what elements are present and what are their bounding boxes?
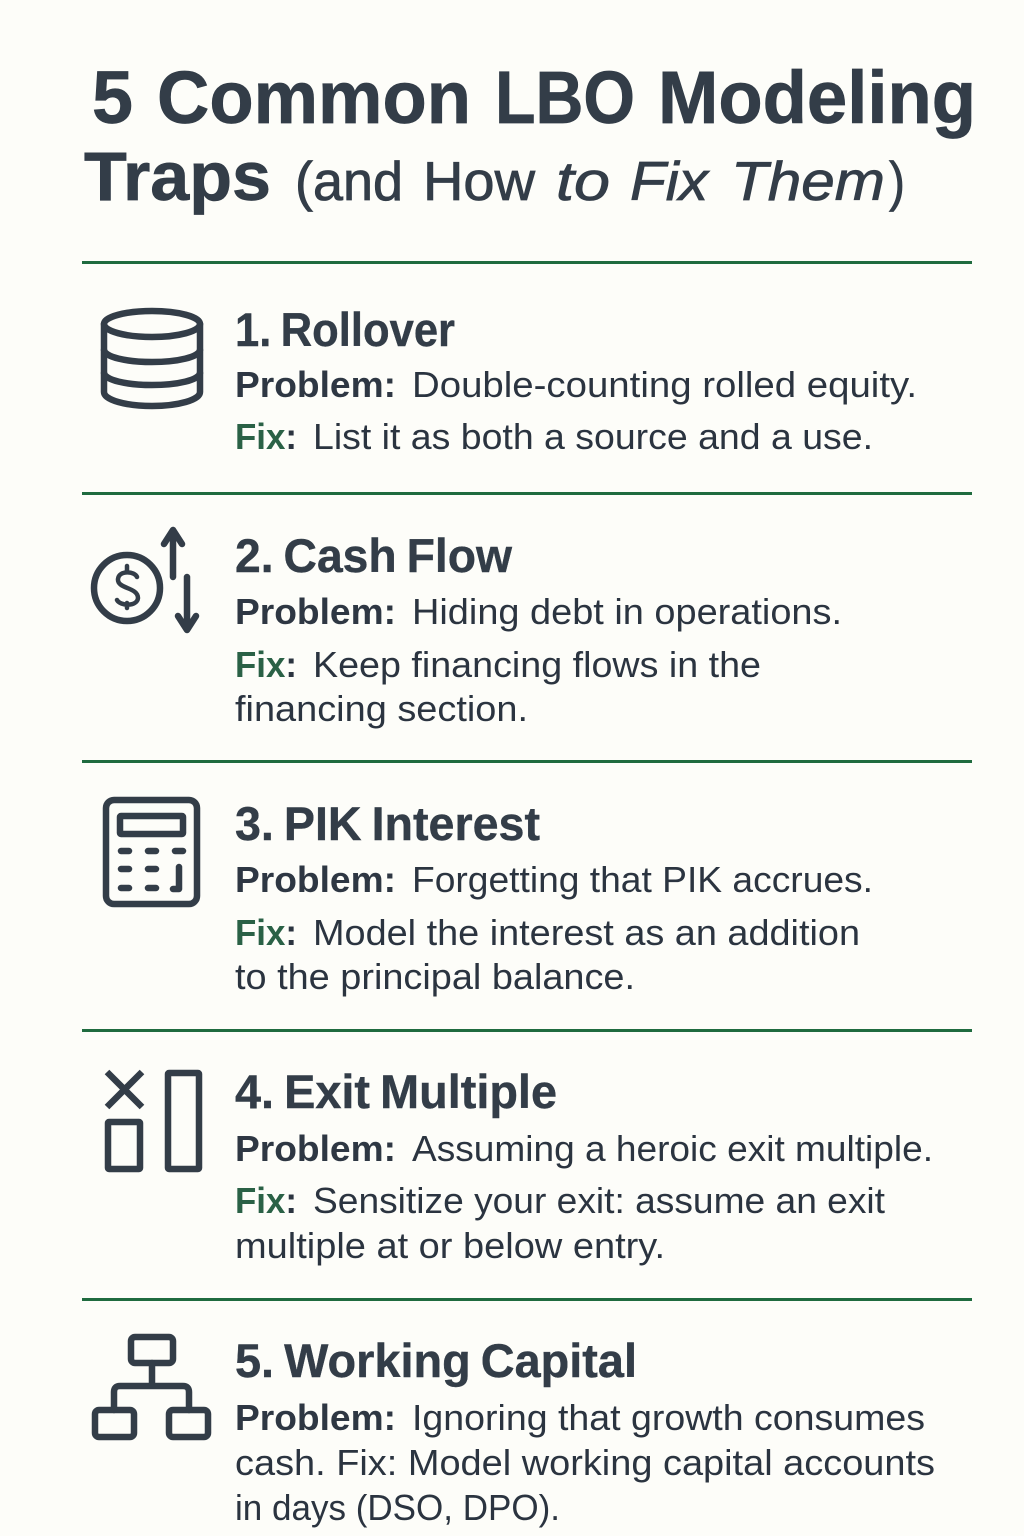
title: Them xyxy=(731,150,885,212)
problem and fix text: Ignoring that growth consumes xyxy=(412,1397,925,1438)
fix text: financing section. xyxy=(235,688,528,729)
problem text: Double-counting rolled equity. xyxy=(412,364,917,405)
title: Fix xyxy=(630,150,711,212)
problem text: Problem: xyxy=(235,859,396,900)
title: Modeling xyxy=(658,56,976,139)
fix text: Fix: xyxy=(235,416,297,457)
fix text: Keep financing flows in the xyxy=(313,644,761,685)
fix text: to the principal balance. xyxy=(235,956,635,997)
panel: 3. PIK Interest xyxy=(106,798,873,997)
title: ) xyxy=(889,150,905,212)
fix text: Fix: xyxy=(235,644,297,685)
title: 5 xyxy=(92,56,133,139)
panel: 1. Rollover xyxy=(104,304,917,457)
problem text: Assuming a heroic exit multiple. xyxy=(412,1128,933,1169)
title: to xyxy=(556,150,610,212)
icon: database stack xyxy=(104,311,200,406)
title: LBO xyxy=(495,56,635,139)
title: (and xyxy=(295,150,403,212)
fix text: Sensitize your exit: assume an exit xyxy=(313,1180,885,1221)
problem text xyxy=(235,591,842,632)
title: Common xyxy=(157,56,471,139)
problem text: Problem: xyxy=(235,364,396,405)
heading: Working Capital: 5. Working Capital xyxy=(235,1335,637,1388)
title xyxy=(84,56,976,215)
fix text: Model the interest as an addition xyxy=(313,912,860,953)
heading: Cash Flow: 2. Cash Flow xyxy=(235,530,513,583)
fix text: Fix: xyxy=(235,912,297,953)
problem and fix text: Problem: xyxy=(235,1397,396,1438)
fix text: List it as both a source and a use. xyxy=(313,416,873,457)
problem text xyxy=(235,364,917,405)
problem text: Hiding debt in operations. xyxy=(412,591,842,632)
fix text xyxy=(235,644,761,729)
icon: calculator xyxy=(106,800,197,904)
panel: 2. Cash Flow xyxy=(94,530,842,729)
icon: dollar with arrows xyxy=(94,530,196,630)
title: Traps xyxy=(84,138,271,215)
panel: 4. Exit Multiple xyxy=(107,1066,933,1266)
problem text: Forgetting that PIK accrues. xyxy=(412,859,873,900)
title: How xyxy=(423,150,535,212)
heading: Exit Multiple: 4. Exit Multiple xyxy=(235,1066,557,1119)
icon: org chart xyxy=(95,1337,208,1437)
problem and fix text: cash. Fix: Model working capital accounts xyxy=(235,1442,935,1483)
problem text: Problem: xyxy=(235,1128,396,1169)
problem and fix text: in days (DSO, DPO). xyxy=(235,1487,560,1528)
heading: Rollover: 1. Rollover xyxy=(235,304,455,357)
problem and fix text xyxy=(235,1397,935,1528)
icon: multiple with bars xyxy=(107,1072,199,1169)
fix text: multiple at or below entry. xyxy=(235,1225,665,1266)
heading: PIK Interest: 3. PIK Interest xyxy=(235,798,540,851)
problem text xyxy=(235,859,873,900)
panel: 5. Working Capital xyxy=(95,1335,935,1528)
fix text: Fix: xyxy=(235,1180,297,1221)
problem text: Problem: xyxy=(235,591,396,632)
fix text xyxy=(235,1180,885,1266)
fix text xyxy=(235,912,860,997)
